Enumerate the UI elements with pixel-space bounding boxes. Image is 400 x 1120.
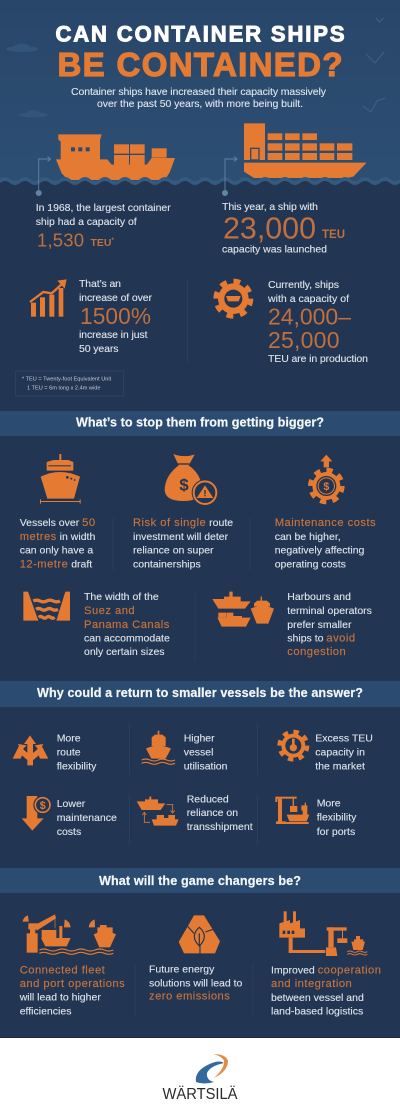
text: more route flexibility (57, 733, 97, 772)
text: excess TEU capacity (315, 733, 373, 772)
footnote box: 1 TEU = 6m long x 2.4m wide (27, 385, 100, 391)
text: improved cooperation: land-based logistics (271, 1006, 363, 1018)
header sea-and-sky background (0, 0, 400, 190)
text: harbours and terminal operators: Harbours and (287, 591, 351, 603)
intro text: over the past 50 years, with more being built. (97, 98, 303, 110)
text: connected fleet: and port operations (20, 978, 125, 990)
text: excess TEU capacity: capacity in (315, 746, 365, 758)
text: this year capacity: 23,000 (223, 212, 316, 246)
text: 1968 capacity: In 1968, the largest container (36, 202, 171, 214)
text: reduced reliance on transshipment (187, 793, 253, 833)
icon: ship width and draft (40, 454, 81, 504)
icon: route flexibility arrows (13, 735, 48, 765)
text: 24,000-25,000 in production: 25,000 (268, 327, 340, 353)
text: future energy solutions: zero emissions (149, 991, 230, 1003)
text: more flexibility for ports (317, 798, 357, 838)
text: 1500% increase: increase of over (79, 292, 152, 304)
text: this year capacity: capacity was launched (222, 244, 327, 256)
text: higher vessel utilisation (184, 733, 228, 772)
text: maintenance costs (275, 517, 376, 570)
icon: lower costs arrow: $ (40, 800, 46, 812)
icon: large modern container ship (244, 123, 367, 178)
text: 1968 capacity: TEU (90, 237, 112, 249)
text: higher vessel utilisation: vessel (184, 746, 213, 758)
banner: game changers: What will the game changers be? (99, 874, 301, 888)
icon: factory to port logistics (279, 911, 367, 956)
text: improved cooperation: Improved cooperation (271, 964, 381, 976)
icon: lower costs arrow (22, 796, 52, 831)
text: more route flexibility: flexibility (57, 760, 97, 772)
icon: gear with gauge (280, 732, 307, 759)
text: suez and panama canals: Suez and (84, 605, 135, 617)
text: this year capacity (222, 201, 345, 256)
text: 1500% increase: That’s an (79, 278, 121, 290)
text: excess TEU capacity: the market (315, 760, 365, 772)
text: 24,000-25,000 in production: 24,000– (268, 304, 351, 330)
text: future energy solutions: solutions will lead to (149, 977, 243, 989)
connector: 1968 ship to caption (36, 156, 50, 196)
icon: gear with ship (216, 281, 251, 316)
text: 1968 capacity: * (112, 238, 114, 244)
text: suez and panama canals: can accommodate (84, 632, 170, 644)
text: suez and panama canals: The width of the (84, 591, 159, 603)
waves (0, 177, 400, 190)
icon: small 1968 container ship (56, 134, 175, 180)
banner: why return to smaller vessels (0, 681, 400, 707)
text: lower maintenance costs (57, 798, 117, 838)
title: BE CONTAINED? (58, 46, 342, 83)
footer (0, 1037, 400, 1120)
banner: game changers (0, 868, 400, 893)
text: future energy solutions (149, 963, 243, 1003)
icon: growth chart (30, 279, 67, 317)
text: harbours and terminal operators: terminal operators (287, 605, 372, 617)
icon: gear with dollar and up arrow (311, 455, 342, 502)
text: harbours and terminal operators: ships to avoid (287, 632, 356, 644)
icon: canal (23, 592, 70, 621)
text: maintenance costs: can be higher, (275, 531, 341, 543)
icon: transshipment ships and arrows (137, 797, 179, 826)
text: connected fleet: Connected fleet (20, 964, 106, 976)
text: harbours and terminal operators: congestion (287, 646, 346, 658)
icon: connected fleet and port (23, 914, 116, 954)
footnote box (16, 371, 124, 396)
text: risk of single route: containerships (133, 558, 201, 570)
text: suez and panama canals (84, 591, 170, 658)
text: connected fleet (19, 964, 125, 1017)
text: improved cooperation (271, 964, 381, 1018)
banner: what's to stop them: What’s to stop them from getting bigger? (76, 416, 324, 430)
text: improved cooperation: and integration (271, 978, 352, 990)
text: reduced reliance on transshipment: transshipment (187, 821, 253, 833)
connector: modern ship to caption (222, 156, 237, 196)
text: suez and panama canals: Panama Canals (84, 619, 170, 631)
text: vessels over 50 metres: can only have a (20, 545, 93, 557)
text: vessels over 50 metres: 12-metre draft (20, 558, 92, 570)
text: 24,000-25,000 in production: TEU are in production (268, 353, 368, 365)
icon: port crane and ship (275, 797, 309, 824)
text: reduced reliance on transshipment: Reduced (187, 793, 229, 805)
banner: why return to smaller vessels: Why could a return to smaller vessels be the answer? (37, 686, 363, 700)
icon: money bag with warning: $ (179, 476, 189, 495)
text: connected fleet: efficiencies (20, 1005, 71, 1017)
text: lower maintenance costs: costs (57, 826, 81, 838)
text: maintenance costs: Maintenance costs (275, 517, 376, 529)
text: more flexibility for ports: More (317, 798, 341, 810)
text: excess TEU capacity: Excess TEU (315, 733, 373, 745)
text: higher vessel utilisation: utilisation (184, 760, 228, 772)
text: maintenance costs: operating costs (275, 558, 346, 570)
banner: what's to stop them (0, 411, 400, 436)
icon: money bag with warning (165, 454, 218, 506)
text: 24,000-25,000 in production: Currently, ships (268, 279, 339, 291)
text: risk of single route (133, 517, 233, 570)
text: risk of single route: investment will deter (133, 531, 229, 543)
text: vessels over 50 metres (20, 517, 96, 570)
text: 1968 capacity: ship had a capacity of (36, 216, 137, 228)
text: this year capacity: TEU (322, 229, 345, 241)
text: vessels over 50 metres: Vessels over 50 (20, 517, 96, 529)
text: 1500% increase (79, 278, 152, 355)
text: 1500% increase: 1500% (80, 303, 151, 329)
logo: Wärtsilä (162, 1054, 238, 1103)
text: risk of single route: reliance on super (133, 545, 214, 557)
title (56, 22, 344, 83)
text: lower maintenance costs: Lower (57, 798, 86, 810)
icon: recycling leaf (179, 915, 220, 954)
text: 1500% increase: 50 years (79, 343, 118, 355)
text: 1968 capacity (36, 202, 171, 250)
text: more flexibility for ports: flexibility (317, 812, 357, 824)
text: harbours and terminal operators: prefer smaller (287, 619, 352, 631)
text: future energy solutions: Future energy (149, 963, 215, 975)
text: 1968 capacity: 1,530 (37, 230, 84, 250)
intro text: Container ships have increased their capacity massively (71, 86, 327, 98)
text: vessels over 50 metres: metres in width (20, 531, 95, 543)
text: this year capacity: This year, a ship with (222, 201, 318, 213)
text: risk of single route: Risk of single route (133, 517, 233, 529)
text: 24,000-25,000 in production: with a capacity of (267, 293, 349, 305)
text: more route flexibility: More (57, 733, 81, 745)
intro text (71, 86, 327, 110)
text: 24,000-25,000 in production (267, 279, 368, 365)
icon: congested harbour ships (212, 592, 274, 627)
text: higher vessel utilisation: Higher (184, 733, 215, 745)
text: maintenance costs: negatively affecting (275, 545, 365, 557)
text: suez and panama canals: only certain sizes (84, 646, 165, 658)
text: more route flexibility: route (57, 746, 81, 758)
text: harbours and terminal operators (287, 591, 372, 658)
text: connected fleet: will lead to higher (19, 992, 101, 1004)
text: more flexibility for ports: for ports (317, 826, 355, 838)
title: CAN CONTAINER SHIPS (56, 22, 344, 46)
icon: gear with dollar and up arrow: $ (323, 481, 329, 493)
text: reduced reliance on transshipment: reliance on (187, 807, 238, 819)
logo: Wärtsilä: WÄRTSILÄ (162, 1085, 238, 1103)
footnote box: * TEU = Twenty-foot Equivalent Unit (22, 377, 112, 383)
text: improved cooperation: between vessel and (271, 992, 364, 1004)
text: lower maintenance costs: maintenance (57, 812, 117, 824)
text: 1500% increase: increase in just (79, 329, 148, 341)
icon: ship on waves (142, 731, 175, 764)
